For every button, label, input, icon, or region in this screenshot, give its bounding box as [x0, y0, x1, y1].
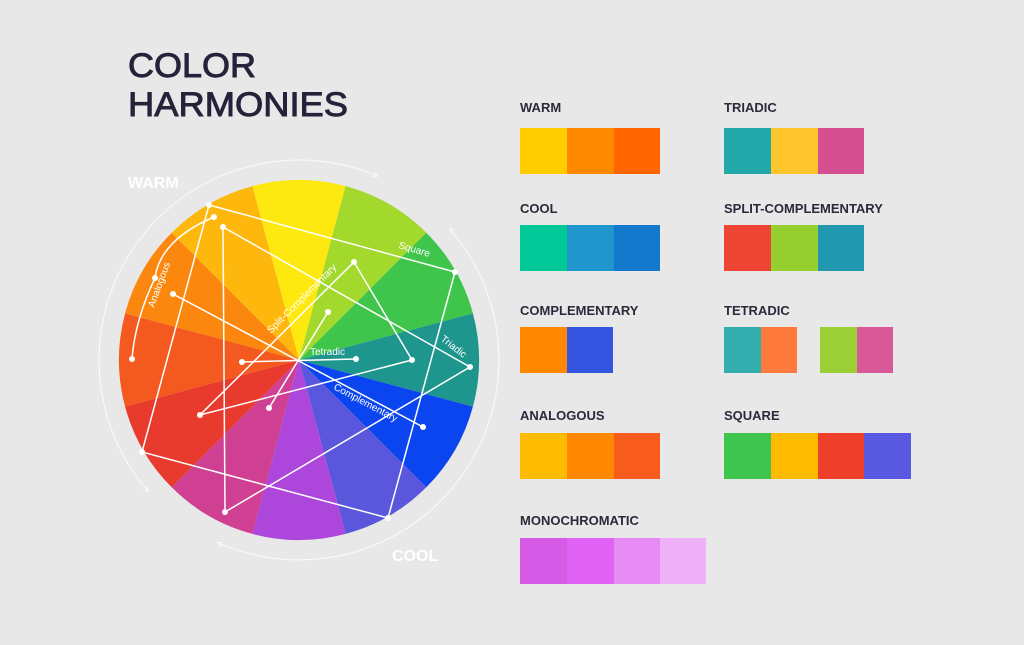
title: COLOR: [128, 47, 256, 85]
wheel labels: Split-Complementary: [265, 262, 339, 336]
swatches: WARM: [520, 100, 561, 115]
swatches: TETRADIC: [724, 303, 790, 318]
wheel labels: Tetradic: [310, 347, 345, 358]
swatches: [520, 100, 883, 528]
triadic swatch: [724, 128, 864, 174]
harmony lines: [132, 205, 470, 518]
title: HARMONIES: [128, 86, 348, 124]
title: [128, 47, 348, 124]
swatches: COMPLEMENTARY: [520, 303, 639, 318]
split-complementary swatch: [724, 225, 864, 271]
wheel labels: Square: [397, 240, 432, 260]
swatches: TRIADIC: [724, 100, 777, 115]
swatches: ANALOGOUS: [520, 408, 605, 423]
wheel labels: Triadic: [438, 334, 468, 361]
complementary swatch: [520, 327, 613, 373]
wheel labels: Analogous: [146, 261, 173, 309]
swatches: SQUARE: [724, 408, 780, 423]
warm label: WARM: [128, 175, 179, 192]
monochromatic swatch: [520, 538, 706, 584]
tetradic swatch: [724, 327, 893, 373]
arrows warm/cool: [99, 160, 499, 560]
dots: [129, 202, 473, 521]
swatches: COOL: [520, 201, 558, 216]
swatches: MONOCHROMATIC: [520, 513, 640, 528]
cool swatch: [520, 225, 660, 271]
color wheel: [119, 180, 479, 540]
analogous swatch: [520, 433, 660, 479]
square swatch: [724, 433, 911, 479]
cool label: COOL: [392, 548, 438, 565]
wheel labels: [146, 240, 468, 425]
wheel labels: Complementary: [332, 382, 399, 425]
swatches: SPLIT-COMPLEMENTARY: [724, 201, 883, 216]
warm swatch: [520, 128, 660, 174]
